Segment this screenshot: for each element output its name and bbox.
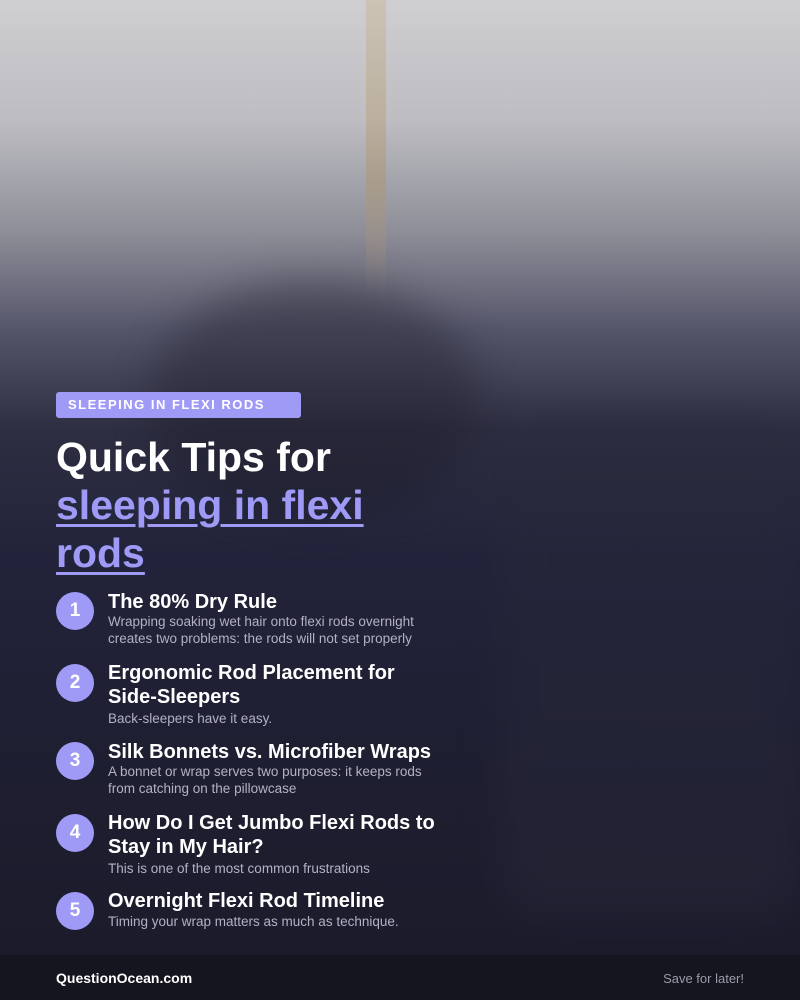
title: rods (56, 530, 145, 576)
title (56, 434, 364, 576)
footer brand: QuestionOcean.com (56, 970, 192, 986)
badge: SLEEPING IN FLEXI RODS (68, 397, 265, 412)
tip 3: 3 (70, 750, 80, 771)
tip 3 (56, 741, 431, 796)
footer (0, 955, 800, 1000)
tip 2 (56, 662, 395, 726)
tip 4: How Do I Get Jumbo Flexi Rods to (108, 812, 435, 834)
title: sleeping in flexi (56, 482, 364, 528)
tip 4: Stay in My Hair? (108, 836, 264, 858)
tip 1: 1 (70, 600, 80, 621)
tip 1: The 80% Dry Rule (108, 591, 277, 613)
tip 5: Timing your wrap matters as much as technique. (108, 914, 399, 929)
background: warm stripe (366, 0, 386, 300)
tip 1 (56, 591, 414, 646)
tip 2: 2 (70, 672, 80, 693)
tip 5: 5 (70, 900, 80, 921)
tip 2: Ergonomic Rod Placement for (108, 662, 395, 684)
tip 3: Silk Bonnets vs. Microfiber Wraps (108, 741, 431, 763)
background: hair silhouette (150, 280, 480, 520)
tip 3: A bonnet or wrap serves two purposes: it keeps rods (108, 764, 422, 779)
tip 3: from catching on the pillowcase (108, 781, 296, 796)
footer cta: Save for later! (663, 971, 744, 986)
tip 5: Overnight Flexi Rod Timeline (108, 890, 384, 912)
tip 4: This is one of the most common frustrations (108, 861, 370, 876)
tip 1: Wrapping soaking wet hair onto flexi rods overnight creates two problems: the rods will not set properly (108, 614, 414, 646)
tip 5 (56, 890, 399, 930)
title: Quick Tips for (56, 434, 331, 480)
tip 4: 4 (70, 822, 80, 843)
tip 2: Back-sleepers have it easy. (108, 711, 272, 726)
background: pillow (500, 420, 800, 920)
badge (56, 392, 301, 418)
tip 4 (56, 812, 435, 876)
tip 2: Side‑Sleepers (108, 686, 240, 708)
